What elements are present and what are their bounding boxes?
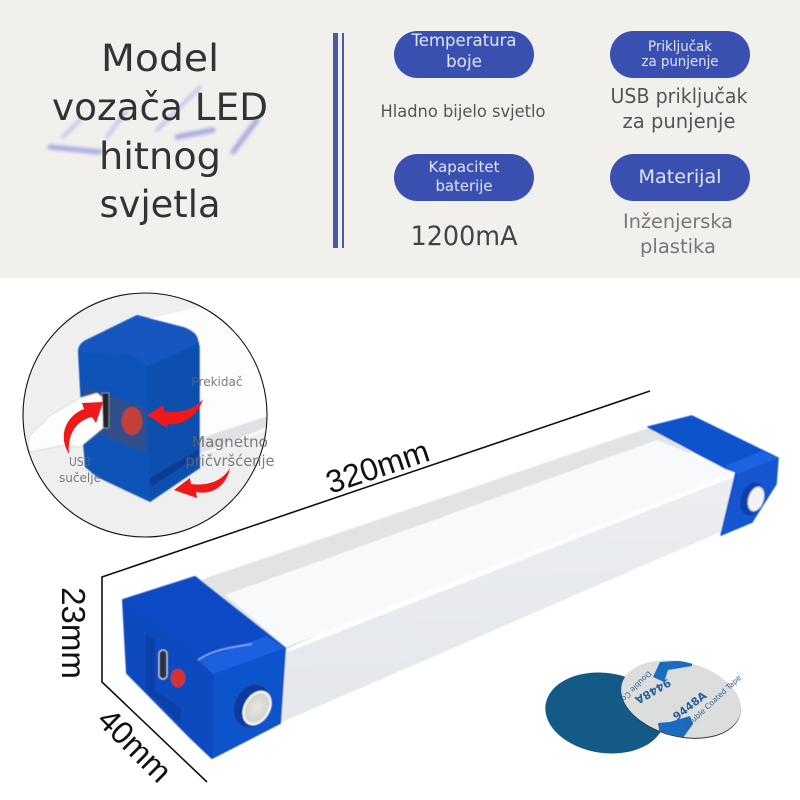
spec: battery capacity: 1200mA xyxy=(410,221,518,252)
inset: USB port xyxy=(102,393,109,428)
label: length 320mm: 320mm xyxy=(321,433,434,501)
red arrow: USB xyxy=(64,402,103,454)
spec: charging port xyxy=(610,31,750,133)
inset circle: connector detail xyxy=(23,290,280,537)
caption: magnetic mounting xyxy=(186,433,274,470)
adhesive magnetic discs xyxy=(545,660,741,754)
spec: charging port: za punjenje xyxy=(642,54,718,70)
round metal button xyxy=(227,679,277,733)
bar body xyxy=(200,428,736,723)
far end button xyxy=(736,479,768,519)
caption: USB interface: sučelje xyxy=(59,470,101,485)
dimension lines xyxy=(102,391,650,782)
inset: white cable plug xyxy=(28,393,103,452)
faded watermark behind title xyxy=(50,87,257,152)
white 3M adhesive disc xyxy=(618,660,741,739)
white 3M adhesive disc: Double Coa xyxy=(616,669,653,706)
3M logo marks xyxy=(653,660,692,682)
red power button xyxy=(171,669,185,687)
spec: colour temperature: Temperatura xyxy=(410,31,516,50)
inset circle outline xyxy=(23,293,267,537)
spec: charging port: za punjenje xyxy=(622,109,736,133)
white 3M adhesive disc: 9448A xyxy=(670,689,710,723)
caption: magnetic mounting: pričvršćenje xyxy=(186,452,274,470)
white 3M adhesive disc: Double Coated Tape xyxy=(682,673,743,731)
spec: battery capacity xyxy=(394,154,534,252)
white 3M adhesive disc: 9448A xyxy=(632,676,673,707)
caption: USB interface: USB xyxy=(69,454,91,469)
title: vozača LED xyxy=(52,86,268,129)
spec: charging port: Priključak xyxy=(648,39,713,55)
label: width 40mm: 40mm xyxy=(91,701,179,789)
red arrow: magnet xyxy=(174,468,230,498)
inset: red power button xyxy=(122,407,142,435)
red arrow: switch xyxy=(147,399,203,428)
spec: material: Inženjerska xyxy=(623,210,733,233)
caption: switch: Prekidač xyxy=(192,375,242,389)
spec: material xyxy=(610,154,750,258)
spec: battery capacity: Kapacitet xyxy=(428,158,500,176)
inset: port panel xyxy=(85,387,146,453)
dark blue metal disc xyxy=(540,665,670,761)
title: svjetla xyxy=(100,183,220,226)
caption: USB interface xyxy=(59,454,101,485)
spec: charging port: USB priključak xyxy=(610,84,748,108)
double vertical divider xyxy=(333,33,344,248)
title: hitnog xyxy=(99,135,221,178)
near end cap xyxy=(123,577,285,758)
far end cap xyxy=(648,416,778,535)
spec: material: Materijal xyxy=(638,166,722,188)
spec: colour temperature: boje xyxy=(446,52,482,71)
title xyxy=(52,37,268,226)
inset: blue end block xyxy=(78,315,200,502)
caption: magnetic mounting: Magnetno xyxy=(192,433,268,451)
title: Model xyxy=(101,37,219,80)
inset: white bar behind block xyxy=(149,308,266,457)
product: LED emergency light bar xyxy=(123,416,778,758)
label: height 23mm: 23mm xyxy=(55,587,92,679)
spec: colour temperature: Hladno bijelo svjetlo xyxy=(380,102,546,122)
spec: battery capacity: baterije xyxy=(436,177,492,195)
spec: material: plastika xyxy=(640,235,716,258)
header background band xyxy=(0,0,800,278)
USB-C port xyxy=(159,650,167,679)
spec: colour temperature xyxy=(380,31,546,122)
